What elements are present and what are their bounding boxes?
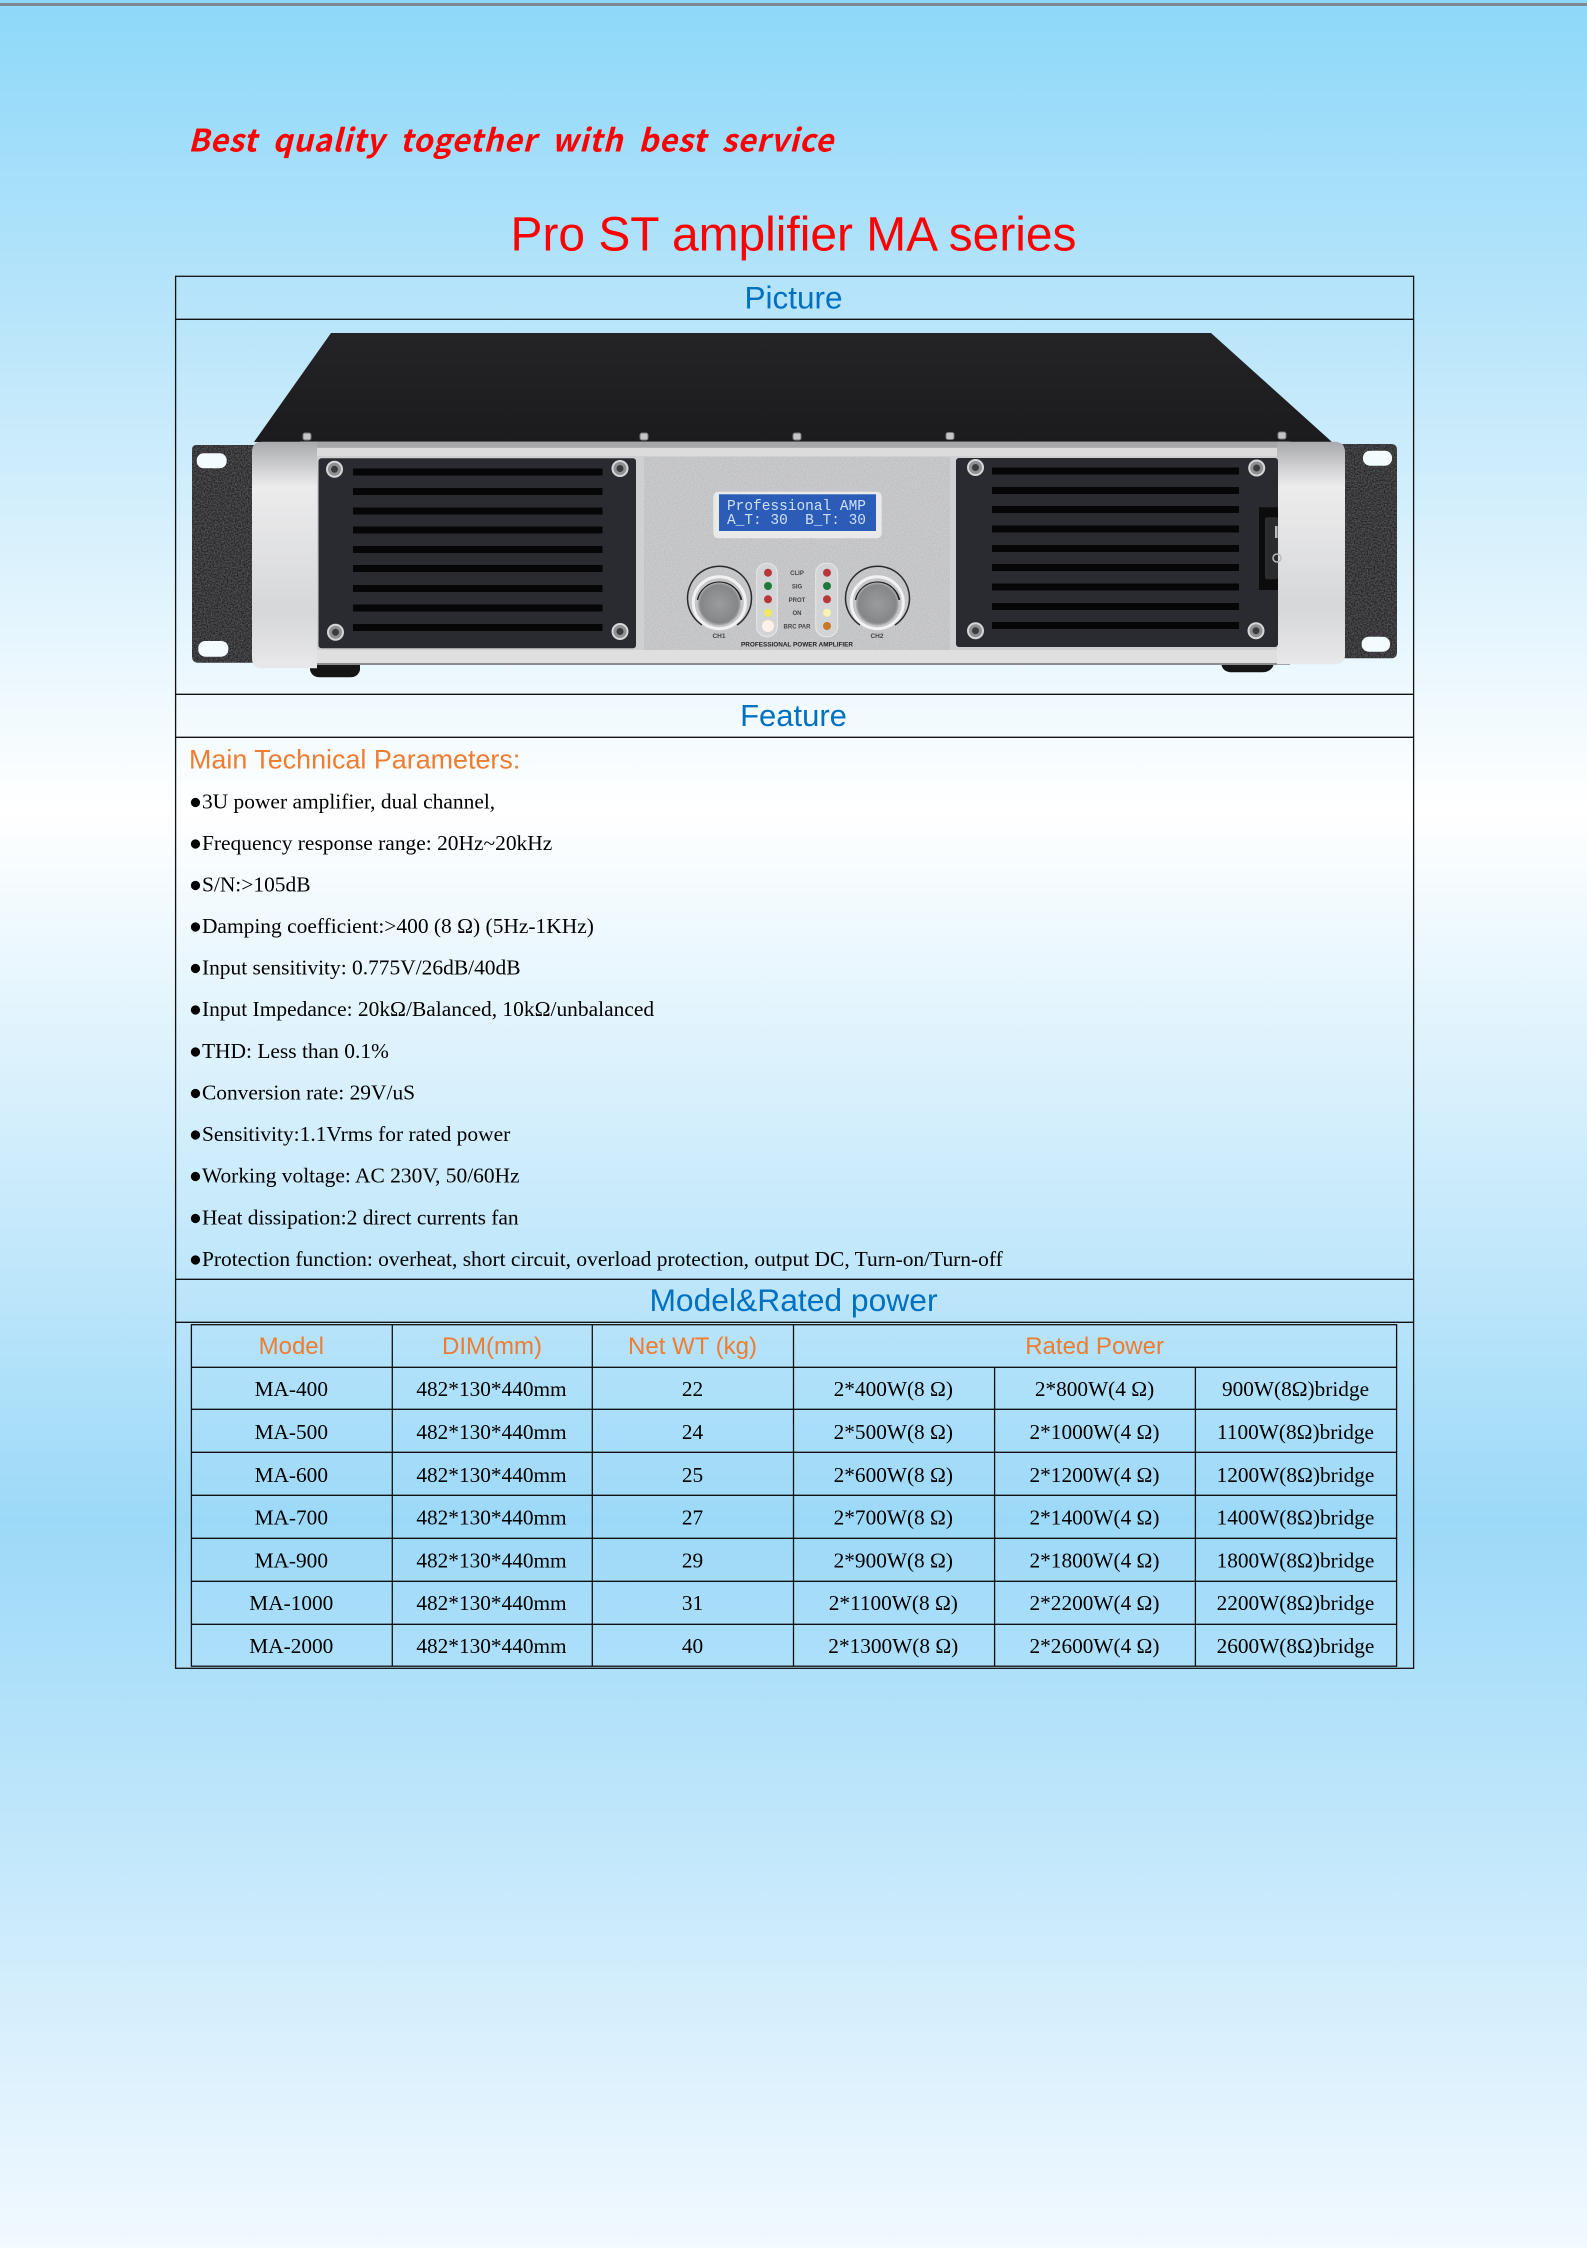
row: MA-2000: 2*1300W(8 Ω) bbox=[828, 1634, 958, 1658]
heading: Model&Rated power: Model&Rated power bbox=[649, 1282, 938, 1318]
LCD display: Professional AMP bbox=[727, 498, 866, 515]
table header row: Rated Power bbox=[1025, 1333, 1164, 1360]
row: MA-900: 1800W(8Ω)bridge bbox=[1217, 1548, 1374, 1572]
parameter lines: ●Working voltage: AC 230V, 50/60Hz bbox=[189, 1164, 520, 1188]
row: MA-900: 2*1800W(4 Ω) bbox=[1030, 1548, 1159, 1572]
row: MA-1000: MA-1000 bbox=[249, 1591, 333, 1615]
row: MA-2000: 482*130*440mm bbox=[416, 1634, 567, 1658]
row: MA-500: 2*500W(8 Ω) bbox=[834, 1420, 953, 1444]
tagline: Best quality together with best service bbox=[188, 116, 836, 160]
amplifier top cover bbox=[254, 333, 1332, 442]
row: MA-700: 1400W(8Ω)bridge bbox=[1217, 1506, 1374, 1530]
parameter lines: ●S/N:>105dB bbox=[189, 872, 311, 896]
power switch bbox=[1259, 507, 1281, 590]
LED indicators: PROT bbox=[789, 598, 806, 604]
right vent panel bbox=[956, 458, 1278, 647]
row: MA-600 bbox=[255, 1463, 1374, 1487]
row: MA-500 bbox=[255, 1420, 1374, 1444]
row: MA-600: 2*600W(8 Ω) bbox=[834, 1463, 953, 1487]
table header row bbox=[259, 1333, 1164, 1360]
top edge line bbox=[0, 3, 1587, 6]
table header row: Net WT (kg) bbox=[628, 1333, 757, 1360]
row: MA-2000: 2*2600W(4 Ω) bbox=[1030, 1634, 1159, 1658]
row: MA-600: 482*130*440mm bbox=[416, 1463, 567, 1487]
row: MA-400: 900W(8Ω)bridge bbox=[1222, 1377, 1369, 1401]
LCD display bbox=[713, 492, 882, 538]
row: MA-1000 bbox=[249, 1591, 1374, 1615]
row: MA-700 bbox=[255, 1506, 1374, 1530]
feet bbox=[310, 660, 1273, 677]
parameter lines: ●Protection function: overheat, short circuit, overload protection, output DC, Turn-on/Turn-off bbox=[189, 1247, 1004, 1271]
LED indicators: ON bbox=[792, 611, 802, 617]
row: MA-900: 482*130*440mm bbox=[416, 1548, 567, 1572]
row: MA-500: 482*130*440mm bbox=[416, 1420, 567, 1444]
left handle bbox=[252, 442, 317, 668]
CH1 knob bbox=[688, 566, 752, 640]
row: MA-1000: 2200W(8Ω)bridge bbox=[1217, 1591, 1374, 1615]
LED indicators: SIG bbox=[792, 584, 802, 590]
right handle bbox=[1277, 442, 1345, 664]
model and rated power table bbox=[191, 1325, 1397, 1666]
plate caption: PROFESSIONAL POWER AMPLIFIER bbox=[741, 642, 854, 648]
row: MA-600: 2*1200W(4 Ω) bbox=[1030, 1463, 1159, 1487]
spec sheet frame lines bbox=[176, 276, 1414, 1668]
row: MA-400: 482*130*440mm bbox=[416, 1377, 567, 1401]
parameter lines: ●Sensitivity:1.1Vrms for rated power bbox=[189, 1122, 510, 1146]
row: MA-700: 2*1400W(4 Ω) bbox=[1030, 1506, 1159, 1530]
parameter lines: ●3U power amplifier, dual channel, bbox=[189, 789, 495, 813]
row: MA-700: MA-700 bbox=[255, 1506, 328, 1530]
row: MA-400: 2*400W(8 Ω) bbox=[834, 1377, 953, 1401]
parameter lines: ●Input sensitivity: 0.775V/26dB/40dB bbox=[189, 956, 521, 980]
row: MA-2000: MA-2000 bbox=[249, 1634, 333, 1658]
heading: Picture: Picture bbox=[744, 279, 843, 315]
row: MA-900: 29 bbox=[682, 1548, 703, 1572]
LED indicators: CLIP bbox=[790, 571, 804, 577]
CH1 knob: CH1 bbox=[712, 633, 726, 640]
picture: professional power amplifier bbox=[192, 333, 1397, 677]
parameter lines: ●Damping coefficient:>400 (8 Ω) (5Hz-1KHz) bbox=[189, 914, 594, 938]
parameter lines: ●THD: Less than 0.1% bbox=[189, 1039, 389, 1063]
silver front frame bbox=[300, 442, 1290, 665]
subheading: main technical parameters: Main Technical Parameters: bbox=[189, 744, 520, 774]
row: MA-400: 2*800W(4 Ω) bbox=[1035, 1377, 1154, 1401]
parameter lines: ●Heat dissipation:2 direct currents fan bbox=[189, 1206, 519, 1230]
row: MA-700: 482*130*440mm bbox=[416, 1506, 567, 1530]
row: MA-600: MA-600 bbox=[255, 1463, 328, 1487]
row: MA-500: 1100W(8Ω)bridge bbox=[1217, 1420, 1374, 1444]
LED indicators bbox=[757, 563, 838, 637]
row: MA-1000: 31 bbox=[682, 1591, 703, 1615]
parameter lines: ●Frequency response range: 20Hz~20kHz bbox=[189, 831, 552, 855]
row: MA-500: 24 bbox=[682, 1420, 704, 1444]
LED indicators: BRC PAR bbox=[784, 624, 811, 630]
row: MA-400 bbox=[255, 1377, 1369, 1401]
row: MA-700: 27 bbox=[682, 1506, 704, 1530]
row: MA-400: MA-400 bbox=[255, 1377, 328, 1401]
row: MA-900: 2*900W(8 Ω) bbox=[834, 1548, 953, 1572]
right rack ear bbox=[1336, 444, 1397, 658]
left rack ear bbox=[192, 445, 256, 663]
table grid bbox=[191, 1325, 1397, 1666]
table header row: DIM(mm) bbox=[442, 1333, 542, 1360]
parameter lines: ●Conversion rate: 29V/uS bbox=[189, 1080, 415, 1104]
heading: Feature: Feature bbox=[740, 698, 847, 733]
LCD display: A_T: 30 B_T: 30 bbox=[727, 512, 866, 529]
top cover screws bbox=[303, 432, 1286, 440]
row: MA-900: MA-900 bbox=[255, 1548, 328, 1572]
parameter lines: ●Input Impedance: 20kΩ/Balanced, 10kΩ/unbalanced bbox=[189, 997, 654, 1021]
title: Pro ST amplifier MA series bbox=[510, 208, 1076, 262]
centre control plate bbox=[644, 457, 950, 650]
CH2 knob bbox=[845, 566, 910, 640]
row: MA-700: 2*700W(8 Ω) bbox=[834, 1506, 953, 1530]
row: MA-1000: 482*130*440mm bbox=[416, 1591, 567, 1615]
row: MA-1000: 2*1100W(8 Ω) bbox=[829, 1591, 958, 1615]
CH2 knob: CH2 bbox=[870, 633, 884, 640]
feature list bbox=[189, 744, 1004, 1271]
row: MA-2000 bbox=[249, 1634, 1374, 1658]
parameter lines bbox=[189, 789, 1004, 1271]
row: MA-2000: 40 bbox=[682, 1634, 703, 1658]
row: MA-600: 25 bbox=[682, 1463, 703, 1487]
row: MA-400: 22 bbox=[682, 1377, 703, 1401]
left vent panel bbox=[318, 458, 636, 648]
row: MA-1000: 2*2200W(4 Ω) bbox=[1030, 1591, 1159, 1615]
row: MA-600: 1200W(8Ω)bridge bbox=[1217, 1463, 1374, 1487]
row: MA-2000: 2600W(8Ω)bridge bbox=[1217, 1634, 1374, 1658]
row: MA-900 bbox=[255, 1548, 1374, 1572]
table header row: Model bbox=[259, 1333, 324, 1360]
row: MA-500: 2*1000W(4 Ω) bbox=[1030, 1420, 1159, 1444]
row: MA-500: MA-500 bbox=[255, 1420, 328, 1444]
